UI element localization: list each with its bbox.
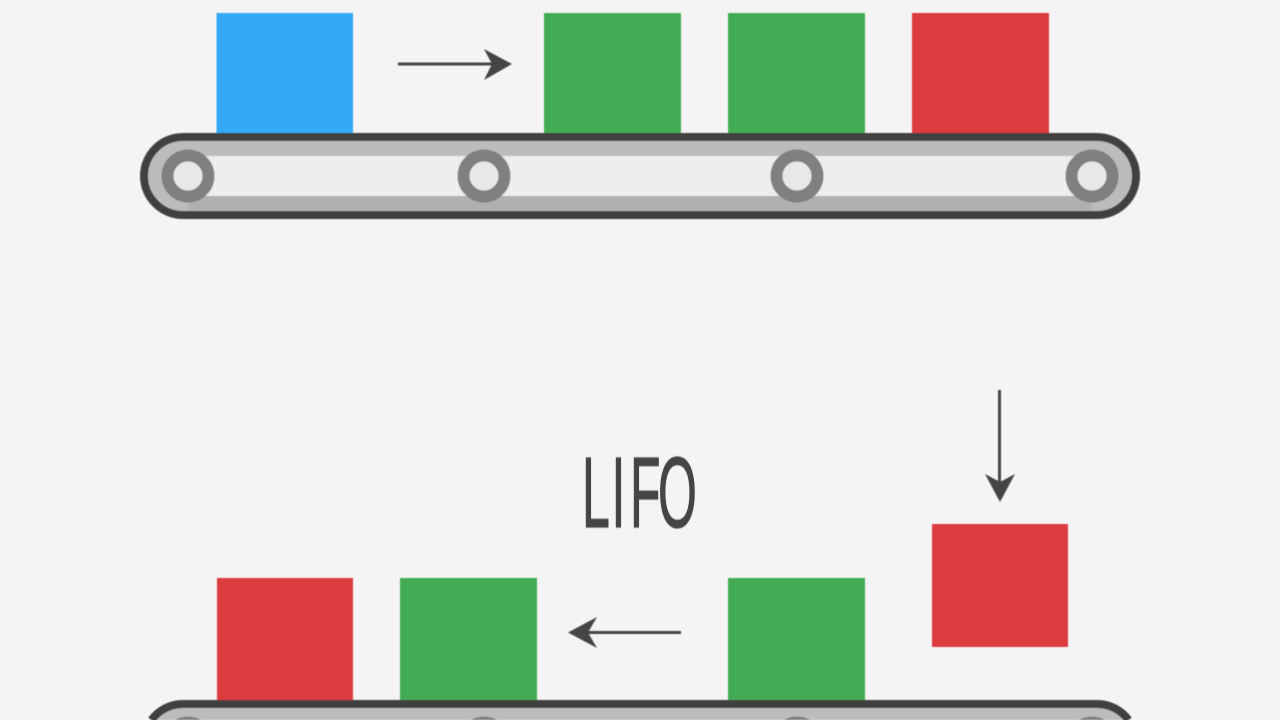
heading: LIFO: LIFO [582, 436, 697, 549]
panel: FIFO conveyor section [144, 13, 1136, 215]
red box on top belt [912, 13, 1049, 135]
roller one [168, 156, 208, 196]
roller three [776, 156, 818, 196]
red box dropping in [932, 524, 1068, 647]
roller four [1072, 156, 1112, 196]
green box two on bottom belt [728, 578, 865, 702]
bottom conveyor belt [152, 704, 1128, 720]
roller tops [175, 716, 1105, 720]
arrow: down [985, 390, 1015, 502]
panel: LIFO conveyor section [152, 390, 1128, 720]
green box two on top belt [728, 13, 865, 135]
blue box on top belt [216, 13, 353, 135]
top conveyor belt [144, 137, 1136, 215]
arrow: left [568, 617, 681, 648]
roller two [464, 156, 504, 196]
red box on bottom belt [217, 578, 353, 702]
green box one on top belt [544, 13, 681, 135]
arrow: right [398, 49, 512, 80]
green box one on bottom belt [400, 578, 537, 702]
